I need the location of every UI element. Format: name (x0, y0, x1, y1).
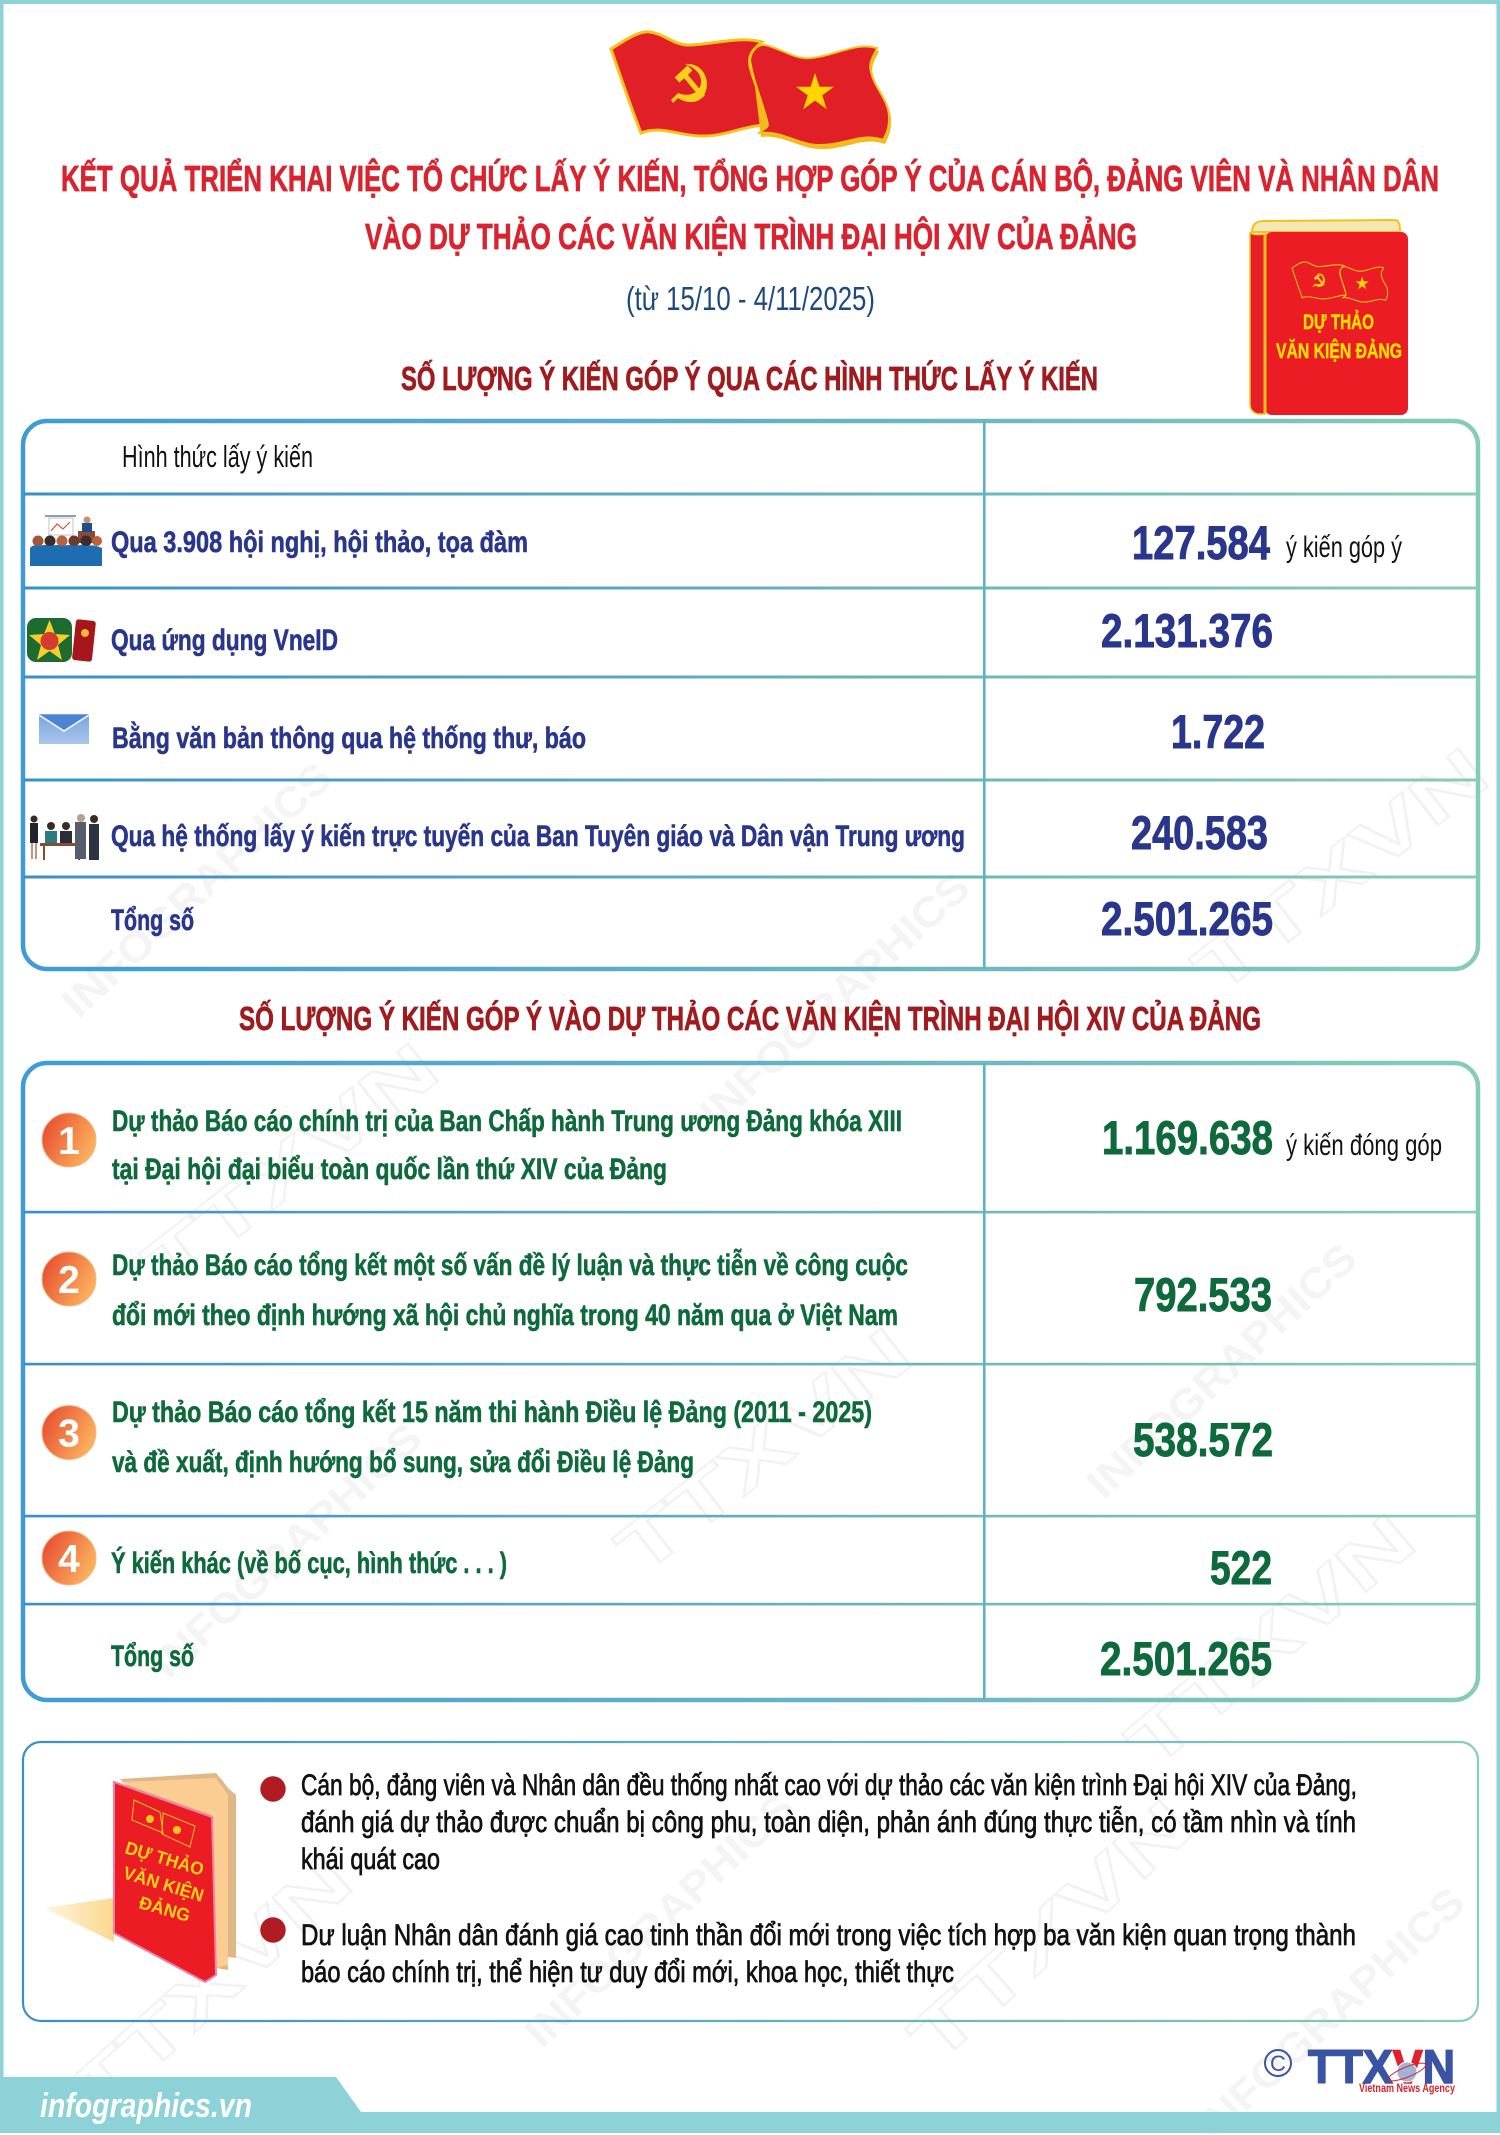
unit: ý kiến đóng góp (1286, 1129, 1442, 1162)
icon: red document book (1250, 220, 1408, 415)
text: TTXVN (1112, 1498, 1430, 1783)
row label: total: Tổng số (111, 904, 194, 937)
item 3 text: và đề xuất, định hướng bổ sung, sửa đổi Điều lệ Đảng (112, 1446, 694, 1479)
row label: total: Tổng số (111, 1640, 194, 1673)
badge 4 (42, 1531, 96, 1585)
text: INFOGRAPHICS (53, 753, 341, 1026)
logo: TTXVN: Vietnam News Agency (1359, 2081, 1455, 2095)
footer site name: infographics.vn (40, 2087, 252, 2125)
value: total: 2.501.265 (1100, 1632, 1272, 1685)
item 1 text (112, 1105, 902, 1186)
text: INFOGRAPHICS (691, 863, 979, 1136)
item 3 text: Dự thảo Báo cáo tổng kết 15 năm thi hành Điều lệ Đảng (2011 - 2025) (112, 1396, 872, 1429)
title (61, 156, 1439, 257)
item 4 text: Ý kiến khác (về bố cục, hình thức . . . ) (111, 1546, 507, 1580)
panel: channel table (23, 421, 1478, 969)
row label: online system: Qua hệ thống lấy ý kiến trực tuyến của Ban Tuyên giáo và Dân vận Trung ương (111, 820, 965, 853)
bullet (260, 1776, 286, 1802)
value 3: 538.572 (1133, 1413, 1273, 1466)
icon: VNeID app (27, 618, 96, 662)
badge 4: 4 (58, 1538, 80, 1581)
item 1 text: tại Đại hội đại biểu toàn quốc lần thứ XIV của Đảng (112, 1153, 667, 1186)
badge 1: 1 (58, 1120, 80, 1163)
badge 3 (42, 1406, 96, 1460)
icon: envelope (39, 714, 89, 744)
note 2 (301, 1919, 1356, 1989)
badge 2 (42, 1252, 96, 1306)
value: total: 2.501.265 (1101, 892, 1273, 945)
heading: opinions by channel: SỐ LƯỢNG Ý KIẾN GÓP Ý QUA CÁC HÌNH THỨC LẤY Ý KIẾN (401, 359, 1098, 397)
icon: people at a table (30, 814, 99, 860)
value: conferences: 127.584 (1132, 516, 1270, 569)
text: INFOGRAPHICS (516, 1783, 804, 2056)
icon: party and national flags (611, 32, 891, 149)
text: TTXVN (895, 1785, 1207, 2077)
text: TTXVN (1179, 732, 1500, 1009)
row label: VNeID: Qua ứng dụng VneID (111, 624, 338, 657)
item 2 text: đổi mới theo định hướng xã hội chủ nghĩa trong 40 năm qua ở Việt Nam (112, 1299, 898, 1332)
value: online system: 240.583 (1131, 806, 1268, 859)
value: VNeID: 2.131.376 (1101, 604, 1273, 657)
text: TTXVN (602, 1312, 926, 1589)
row label: letters: Bằng văn bản thông qua hệ thống thư, báo (112, 721, 586, 755)
icon: red document book: DỰ THẢO (1303, 311, 1374, 334)
value 4: 522 (1210, 1541, 1272, 1594)
note 2: báo cáo chính trị, thể hiện tư duy đổi mới, khoa học, thiết thực (301, 1956, 954, 1989)
item 3 text (112, 1396, 872, 1479)
unit: ý kiến góp ý (1286, 531, 1402, 564)
item 2 text: Dự thảo Báo cáo tổng kết một số vấn đề lý luận và thực tiễn về công cuộc (112, 1248, 908, 1282)
note 1 (301, 1769, 1357, 1876)
icon: red document book: VĂN KIỆN ĐẢNG (1276, 339, 1402, 363)
column header: Hình thức lấy ý kiến (122, 439, 313, 474)
logo: TTXVN: C (1270, 2051, 1286, 2076)
value: letters: 1.722 (1171, 705, 1265, 758)
date range: (từ 15/10 - 4/11/2025) (626, 280, 875, 317)
row label: conferences: Qua 3.908 hội nghị, hội thảo, tọa đàm (111, 526, 528, 559)
item 1 text: Dự thảo Báo cáo chính trị của Ban Chấp hành Trung ương Đảng khóa XIII (112, 1105, 902, 1138)
badge 1 (42, 1113, 96, 1167)
text: TTXVN (129, 1027, 453, 1304)
text: TTXVN (55, 1840, 367, 2132)
title: VÀO DỰ THẢO CÁC VĂN KIỆN TRÌNH ĐẠI HỘI XIV CỦA ĐẢNG (365, 215, 1137, 257)
icon: open red book: VĂN KIỆN (121, 1862, 206, 1906)
icon: conference (30, 516, 102, 566)
icon: open red book: DỰ THẢO (123, 1837, 207, 1880)
text: INFOGRAPHICS (1078, 1234, 1366, 1507)
footer band (0, 2077, 1500, 2133)
note 1: khái quát cao (301, 1843, 440, 1876)
panel: document table (23, 1063, 1478, 1700)
icon: open red book (44, 1773, 236, 1982)
badge 3: 3 (58, 1412, 80, 1456)
value 2: 792.533 (1134, 1268, 1272, 1321)
icon: open red book: ĐẢNG (137, 1892, 193, 1926)
bullet (260, 1917, 286, 1943)
badge 2: 2 (58, 1259, 80, 1302)
text: INFOGRAPHICS (143, 1414, 431, 1687)
item 2 text (112, 1248, 908, 1332)
logo: TTXVN: TTXVN (1308, 2040, 1455, 2093)
panel: assessment notes (23, 1742, 1478, 2021)
value 1: 1.169.638 (1102, 1111, 1273, 1164)
